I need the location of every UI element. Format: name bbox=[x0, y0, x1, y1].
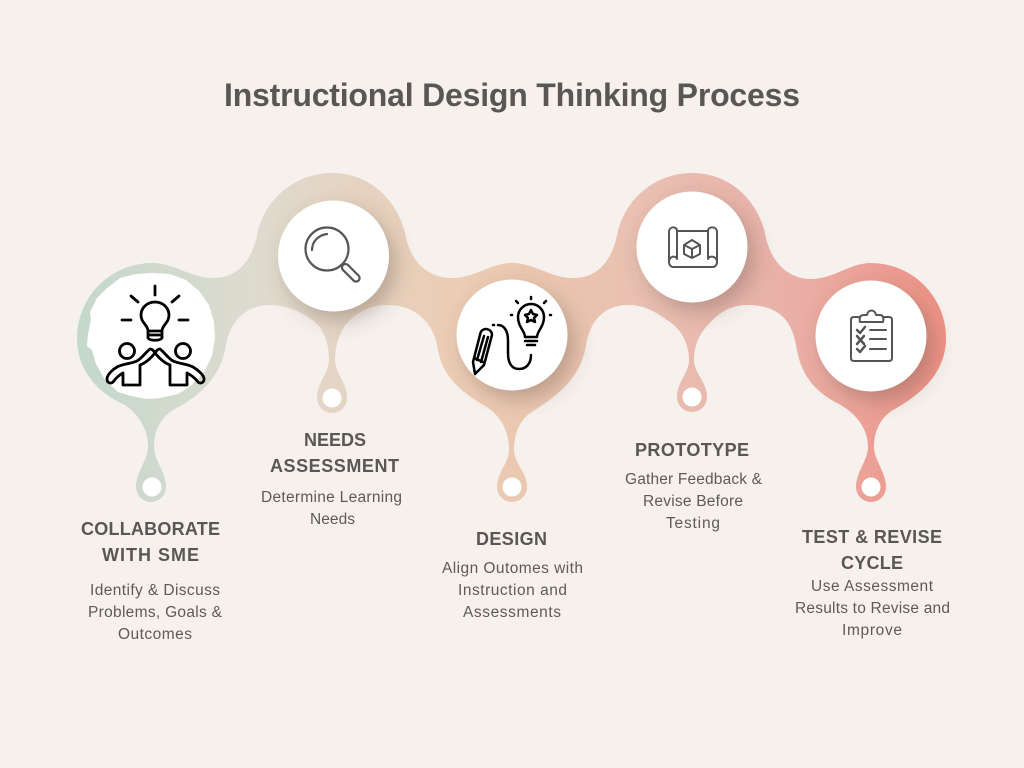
description: Use Assessment bbox=[811, 578, 934, 595]
heading: WITH SME bbox=[102, 545, 199, 565]
description bbox=[625, 471, 763, 532]
icon: pencil wired to lightbulb bbox=[473, 297, 551, 374]
title: Instructional Design Thinking Process bbox=[224, 77, 800, 113]
description: Testing bbox=[666, 515, 720, 532]
heading bbox=[270, 430, 399, 476]
description: Instruction and bbox=[458, 582, 567, 599]
description bbox=[795, 578, 950, 639]
description: Problems, Goals & bbox=[88, 604, 223, 621]
description: Gather Feedback & bbox=[625, 471, 763, 488]
description: Results to Revise and bbox=[795, 600, 950, 617]
icon: lightbulb and high-five bbox=[107, 286, 204, 385]
text: needs assessment bbox=[261, 430, 402, 528]
text: collaborate with SME bbox=[81, 519, 223, 643]
stem dot 2 bbox=[322, 388, 342, 408]
step 4: prototype bbox=[636, 192, 748, 302]
text: design bbox=[442, 529, 583, 621]
heading: ASSESSMENT bbox=[270, 456, 399, 476]
description bbox=[261, 489, 402, 528]
description: Identify & Discuss bbox=[90, 582, 220, 599]
heading bbox=[802, 527, 942, 573]
description bbox=[88, 582, 223, 643]
description: Outcomes bbox=[118, 626, 192, 643]
heading: TEST & REVISE bbox=[802, 527, 942, 547]
brushed white disc bbox=[87, 273, 215, 399]
heading: COLLABORATE bbox=[81, 519, 220, 539]
step 3: design bbox=[456, 280, 568, 390]
stem dot 1 bbox=[142, 478, 162, 496]
heading: NEEDS bbox=[304, 430, 366, 450]
text: prototype bbox=[625, 440, 763, 532]
icon: blueprint scroll with cube bbox=[669, 227, 717, 267]
stem dot 3 bbox=[502, 478, 522, 496]
white disc bbox=[278, 200, 389, 312]
text: test and revise cycle bbox=[795, 527, 950, 639]
stem dot 4 bbox=[682, 388, 702, 406]
icon: magnifying glass bbox=[306, 228, 361, 283]
stem dot 5 bbox=[862, 478, 880, 496]
description: Assessments bbox=[463, 604, 561, 621]
white disc bbox=[456, 280, 568, 390]
icon: clipboard checklist bbox=[851, 310, 892, 361]
description: Revise Before bbox=[643, 493, 743, 510]
description bbox=[442, 560, 583, 621]
heading bbox=[81, 519, 220, 565]
description: Determine Learning bbox=[261, 489, 402, 506]
white disc bbox=[816, 280, 926, 392]
step 5: test and revise cycle bbox=[816, 280, 926, 392]
step 2: needs assessment bbox=[278, 200, 389, 312]
white disc bbox=[636, 192, 748, 302]
description: Needs bbox=[310, 511, 355, 528]
step 1: collaborate with SME bbox=[87, 273, 215, 399]
heading: CYCLE bbox=[841, 553, 903, 573]
ribbon: connected process path with five stems bbox=[77, 173, 946, 502]
description: Align Outomes with bbox=[442, 560, 583, 577]
description: Improve bbox=[842, 622, 902, 639]
heading: PROTOTYPE bbox=[635, 440, 749, 460]
heading: DESIGN bbox=[476, 529, 547, 549]
